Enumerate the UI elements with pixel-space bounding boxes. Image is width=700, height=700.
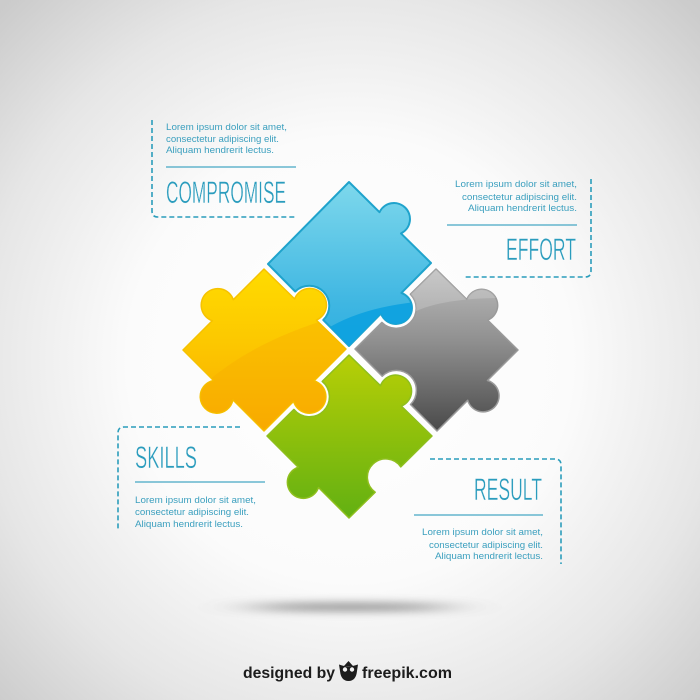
effort description: Aliquam hendrerit lectus.: [468, 202, 577, 213]
footer credit: designed by: [243, 665, 335, 682]
skills description: consectetur adipiscing elit.: [135, 506, 249, 517]
puzzle: green piece: [267, 355, 432, 518]
puzzle: yellow piece: [182, 268, 347, 432]
puzzle: blue piece: [268, 182, 431, 360]
effort description: [455, 178, 577, 213]
skills description: Aliquam hendrerit lectus.: [135, 518, 243, 529]
result description: consectetur adipiscing elit.: [429, 539, 543, 550]
panel: compromise: [152, 120, 297, 217]
compromise description: consectetur adipiscing elit.: [166, 133, 279, 144]
panel: effort: [447, 178, 591, 277]
compromise description: Aliquam hendrerit lectus.: [166, 144, 274, 155]
effort heading: EFFORT: [506, 231, 576, 267]
result description: Lorem ipsum dolor sit amet,: [422, 526, 543, 537]
panel: result: [414, 459, 561, 564]
ground shadow: [245, 603, 455, 611]
compromise description: [166, 121, 287, 155]
skills description: Lorem ipsum dolor sit amet,: [135, 494, 256, 505]
panel: skills: [118, 427, 265, 531]
compromise description: Lorem ipsum dolor sit amet,: [166, 121, 287, 132]
result heading: RESULT: [474, 471, 542, 507]
compromise heading: COMPROMISE: [166, 174, 286, 210]
result description: [422, 526, 543, 561]
puzzle: gray piece: [355, 260, 518, 431]
footer credit: [243, 661, 452, 682]
skills description: [135, 494, 256, 529]
icon: freepik logo: [339, 661, 358, 681]
effort description: consectetur adipiscing elit.: [462, 191, 577, 202]
footer credit: freepik.com: [362, 665, 452, 682]
skills heading: SKILLS: [135, 439, 197, 475]
effort description: Lorem ipsum dolor sit amet,: [455, 178, 577, 189]
result description: Aliquam hendrerit lectus.: [435, 550, 543, 561]
